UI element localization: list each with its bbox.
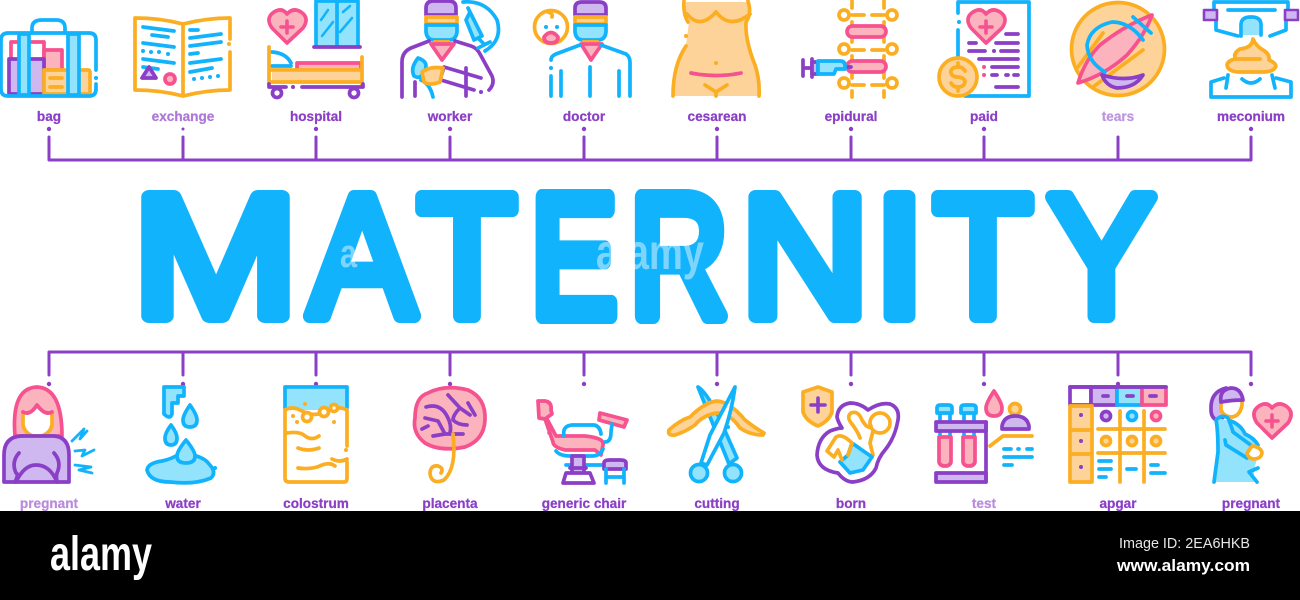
- title: N: [741, 159, 869, 353]
- icon: epidural: [803, 1, 897, 97]
- icon: test: [936, 391, 1032, 482]
- labels: top row: worker: [427, 109, 473, 124]
- icon: tears: [1072, 2, 1164, 96]
- labels: top row: hospital: [290, 109, 342, 124]
- labels: top row: doctor: [563, 109, 606, 124]
- icon: meconium: [1204, 2, 1298, 97]
- title: I: [874, 159, 925, 353]
- icon: worker: [402, 1, 498, 97]
- icon: paid: [939, 2, 1029, 96]
- labels: bottom row: placenta: [422, 496, 478, 511]
- title: R: [630, 159, 728, 353]
- title: T: [934, 159, 1032, 353]
- icon: hospital: [269, 1, 363, 98]
- labels: bottom row: water: [164, 496, 201, 511]
- labels: top row: [37, 109, 1285, 124]
- labels: bottom row: pregnant: [1222, 496, 1281, 511]
- footer bar: [0, 511, 1300, 600]
- labels: bottom row: pregnant: [20, 496, 79, 511]
- icon: placenta: [414, 388, 485, 482]
- labels: bottom row: born: [836, 496, 866, 511]
- title: T: [418, 159, 516, 353]
- icon: apgar: [1070, 387, 1166, 482]
- labels: top row: epidural: [825, 109, 877, 124]
- labels: top row: cesarean: [688, 109, 746, 124]
- icon: cutting: [669, 387, 764, 482]
- labels: top row: meconium: [1217, 109, 1285, 124]
- labels: bottom row: [20, 496, 1281, 511]
- image id: Image ID: 2EA6HKB: [1119, 535, 1250, 552]
- top connector: [47, 127, 1253, 160]
- labels: bottom row: cutting: [694, 496, 740, 511]
- title: A: [309, 159, 416, 353]
- title: Y: [1048, 159, 1155, 353]
- labels: bottom row: colostrum: [283, 496, 349, 511]
- title: M: [133, 159, 298, 353]
- watermark: alamy: [596, 224, 704, 280]
- icon: colostrum: [285, 387, 348, 482]
- alamy logo: alamy: [50, 528, 152, 581]
- bottom connector: [47, 352, 1253, 386]
- labels: top row: exchange: [152, 109, 215, 124]
- watermark: [340, 224, 704, 280]
- labels: top row: paid: [970, 109, 998, 124]
- labels: bottom row: generic chair: [542, 496, 627, 511]
- website: www.alamy.com: [1116, 556, 1250, 575]
- watermark: a: [340, 232, 358, 276]
- icon: water: [147, 387, 217, 483]
- title: [133, 159, 1155, 353]
- icon: generic chair: [538, 401, 627, 483]
- icon: pregnant woman with heart: [1211, 388, 1291, 482]
- icon: pregnant woman in pain: [4, 387, 94, 482]
- icon: born: [803, 387, 898, 482]
- title: E: [531, 159, 617, 353]
- icon: cesarean: [673, 1, 759, 96]
- icon: doctor: [534, 2, 630, 96]
- labels: top row: tears: [1102, 109, 1134, 124]
- icon: exchange book: [135, 18, 231, 96]
- labels: bottom row: test: [972, 496, 997, 511]
- labels: top row: bag: [37, 109, 61, 124]
- icon: bag: [1, 20, 98, 96]
- labels: bottom row: apgar: [1099, 496, 1137, 511]
